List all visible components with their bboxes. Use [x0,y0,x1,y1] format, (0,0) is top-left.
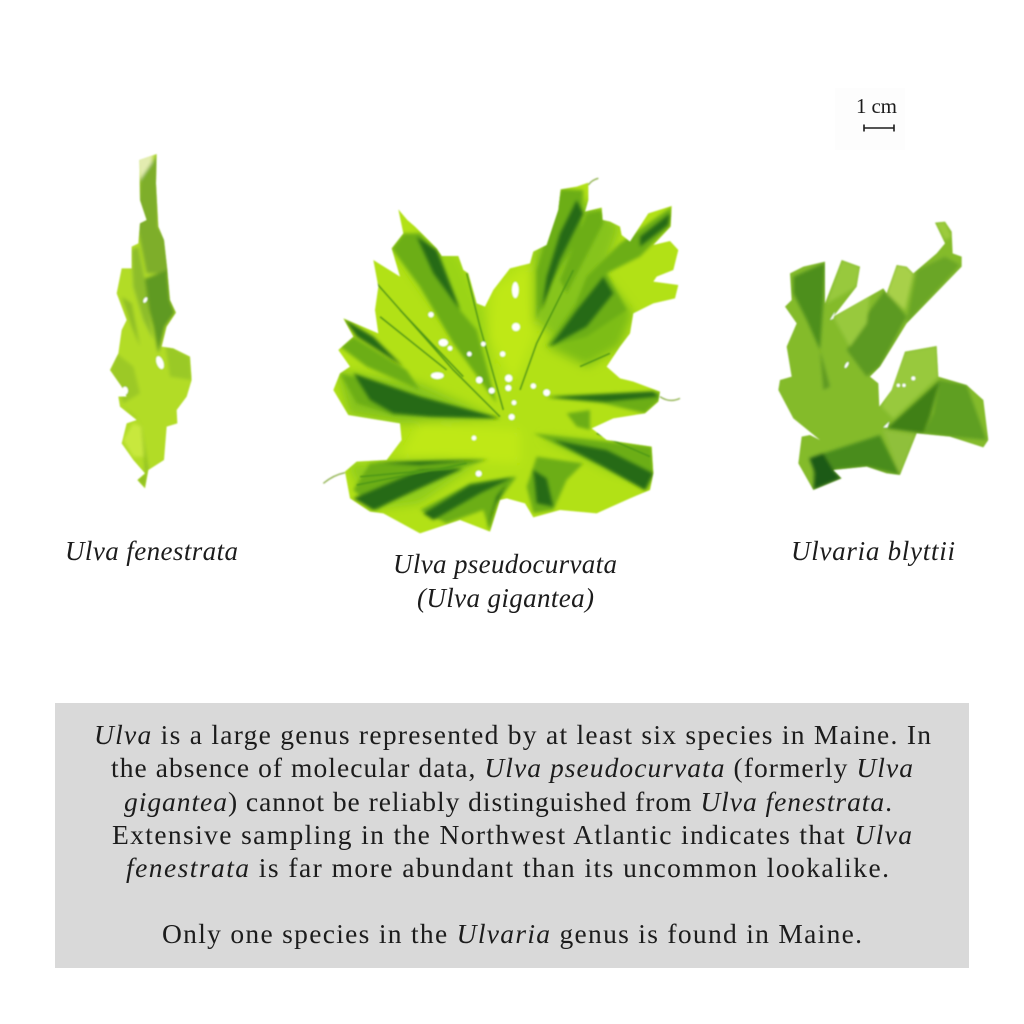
specimen: Ulva fenestrata seaweed [109,153,193,489]
label: Ulvaria blyttii: Ulvaria blyttii [791,536,955,566]
specimen: Ulvaria blyttii seaweed [770,217,997,493]
thin crease lines [357,270,650,485]
paragraph: Ulva in Maine: fenestrata is far more abundant than its uncommon lookalike. [126,852,889,883]
holes in the blade [428,282,550,477]
trailing wisps [323,178,680,483]
paragraph: Ulva in Maine: Extensive sampling in the Northwest Atlantic indicates that Ulva [112,819,912,850]
label: Ulva pseudocurvata (Ulva gigantea): (Ulva gigantea) [417,583,594,613]
dark folds [343,200,670,530]
darker blade lobes [793,263,825,350]
specimen: Ulva pseudocurvata seaweed [320,170,687,537]
gaps and highlights [830,312,915,427]
text panel: genus notes [55,703,969,968]
scale bar: 1 cm [835,88,905,150]
scale bar: 1 cm: 1 cm [856,94,897,118]
paragraph: Ulva in Maine [94,719,931,883]
label: Ulva fenestrata: Ulva fenestrata [65,536,238,566]
paragraph: Ulvaria in Maine: Only one species in the Ulvaria genus is found in Maine. [162,918,862,949]
label: Ulva pseudocurvata (Ulva gigantea): Ulva pseudocurvata [393,549,617,579]
broad tone areas [337,188,653,510]
paragraph: Ulva in Maine: gigantea) cannot be reliably distinguished from Ulva fenestrata. [124,786,892,817]
paragraph: Ulva in Maine: the absence of molecular data, Ulva pseudocurvata (formerly Ulva [111,752,913,783]
mid-tone folds [340,189,672,532]
label: Ulva pseudocurvata (Ulva gigantea) [393,549,617,613]
paragraph: Ulva in Maine: Ulva is a large genus represented by at least six species in Maine. In [94,719,931,750]
